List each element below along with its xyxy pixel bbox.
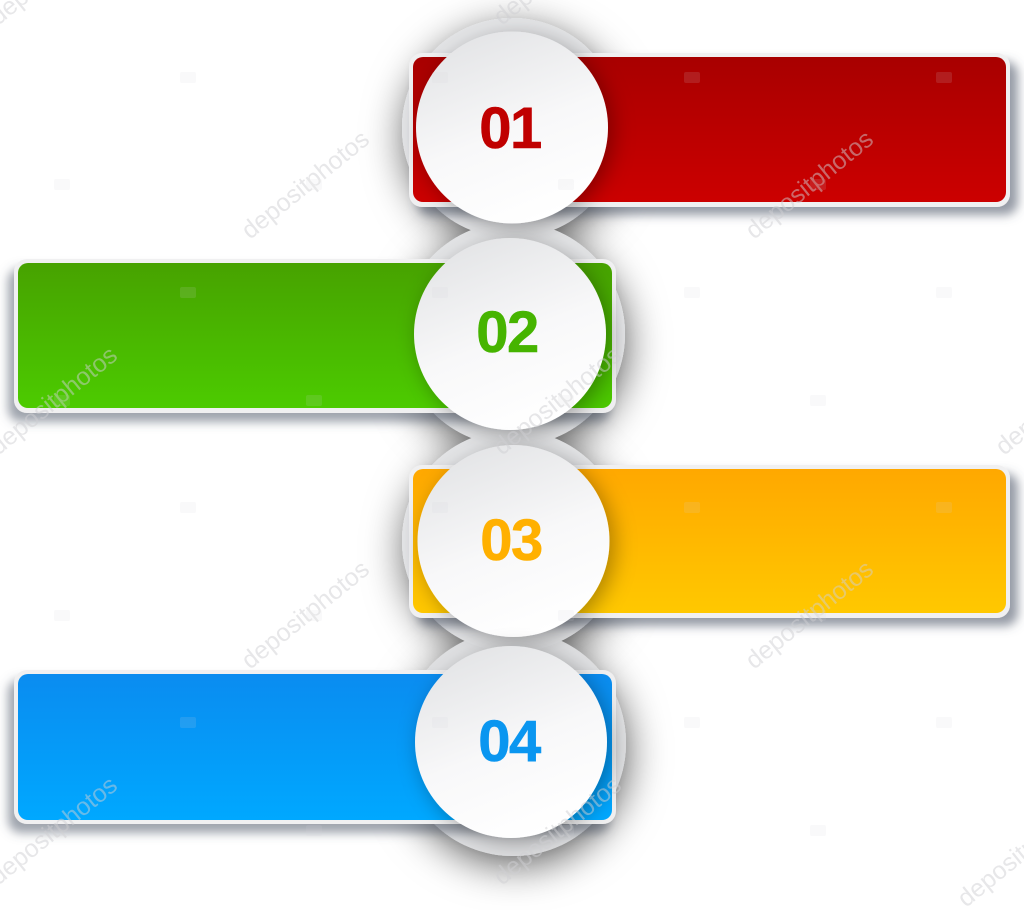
number 04: 04 bbox=[478, 709, 541, 774]
panel: orange banner 03 bbox=[409, 465, 1010, 618]
number 02: 02 bbox=[476, 300, 538, 365]
watermark: depositphotos bbox=[236, 555, 375, 675]
watermark: depositphotos bbox=[740, 125, 879, 245]
badge 01 bbox=[416, 32, 608, 224]
watermark: depositphotos bbox=[236, 125, 375, 245]
watermark: depositphotos bbox=[488, 341, 627, 461]
number 01: 01 bbox=[479, 96, 541, 161]
watermark: depositphotos bbox=[740, 555, 879, 675]
badge 03 bbox=[418, 445, 610, 637]
badge 04 bbox=[415, 646, 607, 838]
panel: red banner 01 bbox=[409, 53, 1010, 207]
panel: blue banner 04 bbox=[14, 670, 616, 824]
watermark: depositphotos bbox=[488, 771, 627, 891]
backing discs bbox=[400, 18, 626, 856]
number 03: 03 bbox=[480, 508, 542, 573]
panel: green banner 02 bbox=[14, 259, 616, 413]
badge 02 bbox=[414, 238, 606, 430]
